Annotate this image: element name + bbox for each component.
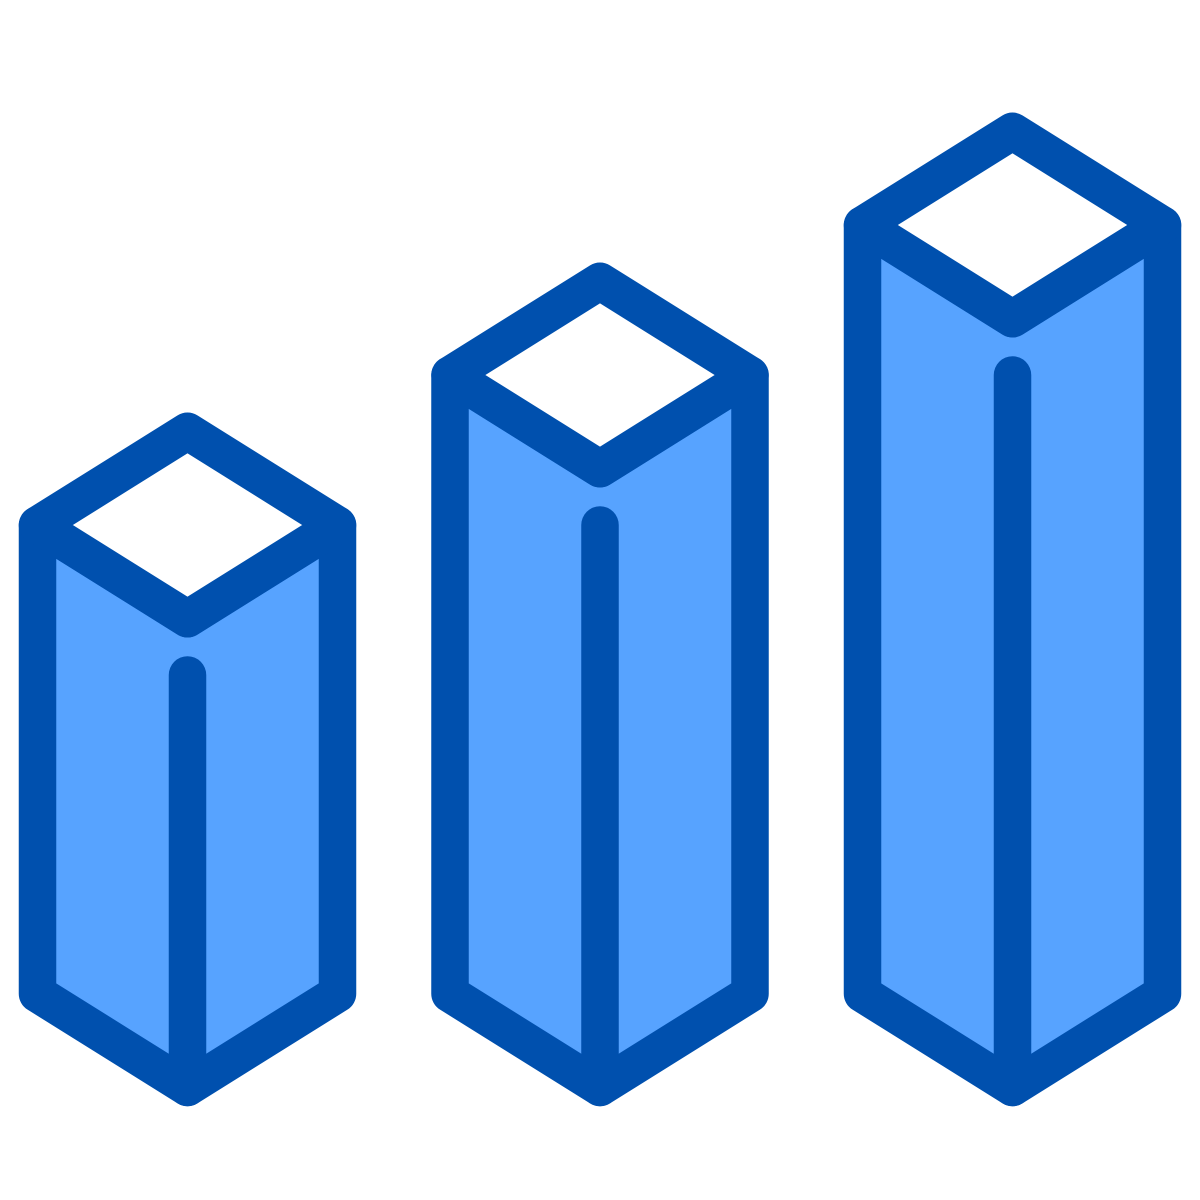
bar: tall right <box>862 131 1162 1088</box>
bar: medium centre <box>450 281 750 1088</box>
bar: short left <box>38 431 338 1088</box>
